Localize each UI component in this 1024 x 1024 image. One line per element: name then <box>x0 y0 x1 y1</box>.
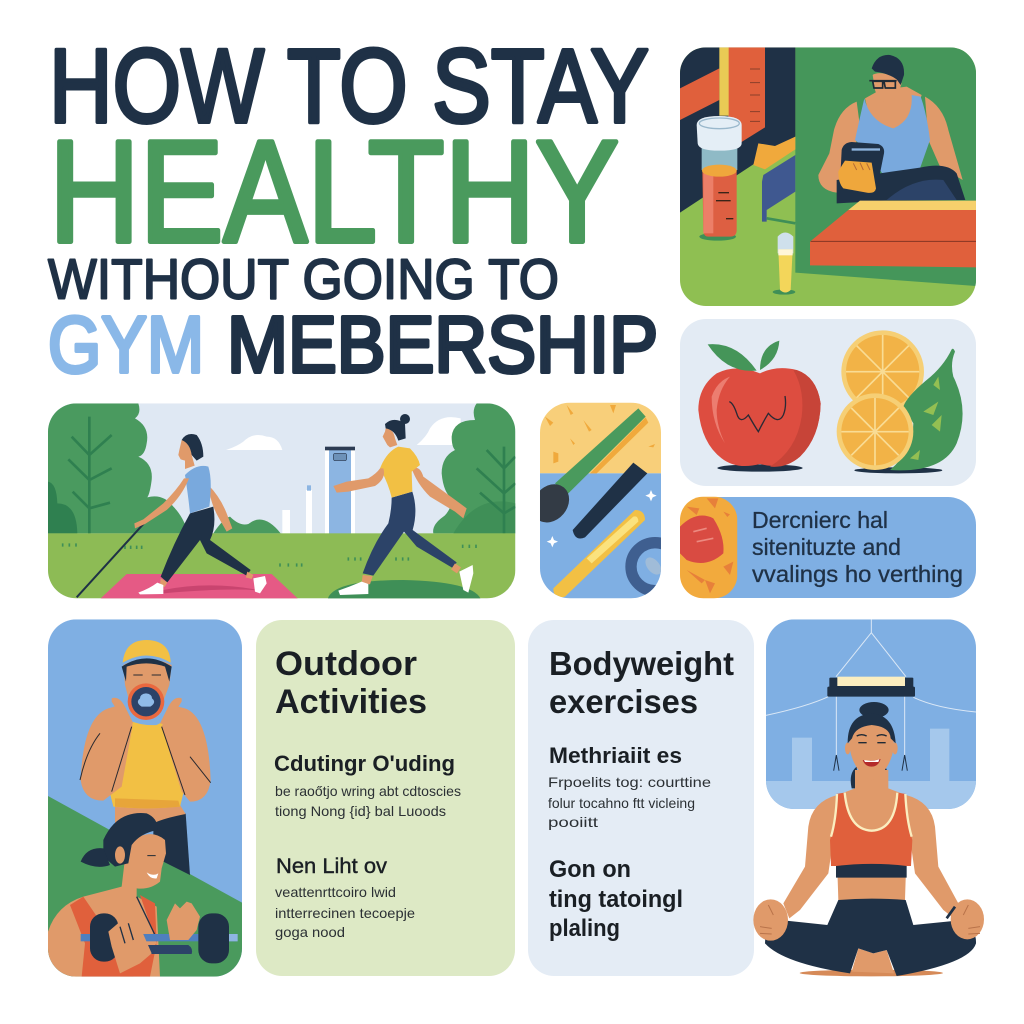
section: cduting outing: be raoőtjo wring abt cdtoscies <box>275 783 461 799</box>
section: nen liht: veattenrttcoiro lwid <box>275 884 396 900</box>
section: gon on: Gon on <box>549 856 631 883</box>
panel: walking in park <box>48 403 515 599</box>
panel: man at home with drinks <box>680 47 976 306</box>
green mat <box>328 580 481 599</box>
section: gon on <box>549 856 683 942</box>
title line: without going to: WITHOUT GOING TO <box>48 248 559 312</box>
title line: how to stay: HOW TO STAY <box>49 28 649 145</box>
walker in yellow <box>333 414 473 595</box>
title word: gym: GYM <box>48 300 204 389</box>
yellow stick <box>553 510 645 597</box>
section: nen liht <box>275 855 415 940</box>
title line: healthy: HEALTHY <box>49 110 619 272</box>
trees <box>48 403 188 533</box>
clouds <box>226 417 461 450</box>
section: cduting outing: tiong Nong {id} bal Luoods <box>275 803 446 819</box>
dumbbell <box>81 902 238 973</box>
pill text: sitenituzte and <box>752 534 901 560</box>
panel: blue info pill <box>680 497 976 598</box>
section: methriaiit: Methriaiit es <box>549 743 682 768</box>
yoga mat <box>100 574 298 599</box>
section: nen liht: intterrecinen tecoepje <box>275 905 415 921</box>
section: gon on: plaling <box>549 915 620 942</box>
walker in blue <box>77 434 267 597</box>
section: nen liht: goga nood <box>275 924 345 940</box>
woman with dumbbell <box>48 813 166 977</box>
section: methriaiit: pooiitt <box>548 814 598 830</box>
heading: bodyweight exercises <box>549 645 734 720</box>
panel: outdoor activities card <box>256 620 515 976</box>
heading: outdoor activities <box>275 645 427 721</box>
title <box>48 28 658 389</box>
handle <box>573 463 647 539</box>
hanging lamp <box>827 677 915 771</box>
woman <box>753 702 984 976</box>
sparkles <box>547 490 657 547</box>
section: methriaiit <box>548 743 711 830</box>
section: methriaiit: Frpoelits tog: courttine <box>548 774 711 790</box>
pill text: vvalings ho verthing <box>752 561 963 587</box>
man <box>818 55 965 203</box>
heading: bodyweight exercises: Bodyweight <box>549 645 734 682</box>
grass <box>48 533 515 598</box>
heading: bodyweight exercises: exercises <box>549 683 698 720</box>
section: methriaiit: folur tocahno ftt vicleing <box>548 795 695 811</box>
panel: bodyweight exercises card <box>528 620 754 976</box>
heading: outdoor activities: Activities <box>275 683 427 721</box>
panel: fruit <box>680 319 976 486</box>
tower <box>282 447 355 534</box>
panel: man with bottle and woman with dumbbell <box>48 619 242 977</box>
section: cduting outing <box>274 751 461 819</box>
icon: fruit thumbnail <box>680 497 737 598</box>
panel: fitness tools <box>540 402 661 598</box>
icon: orange slices and leaf <box>837 330 963 473</box>
title word: mebership: MEBERSHIP <box>227 300 658 389</box>
heading: outdoor activities: Outdoor <box>275 645 417 683</box>
section: nen liht: Nen Liht ov <box>276 855 388 878</box>
section: gon on: ting tatoingl <box>549 886 683 913</box>
resistance band <box>590 417 648 473</box>
pill text: Dercnierc hal <box>752 507 888 533</box>
section: cduting outing: Cdutingr O'uding <box>274 751 455 776</box>
icon: apple <box>698 341 821 472</box>
panel: meditating woman <box>753 619 984 976</box>
man <box>80 640 211 875</box>
weight plate <box>631 543 679 591</box>
pill text <box>752 507 963 587</box>
